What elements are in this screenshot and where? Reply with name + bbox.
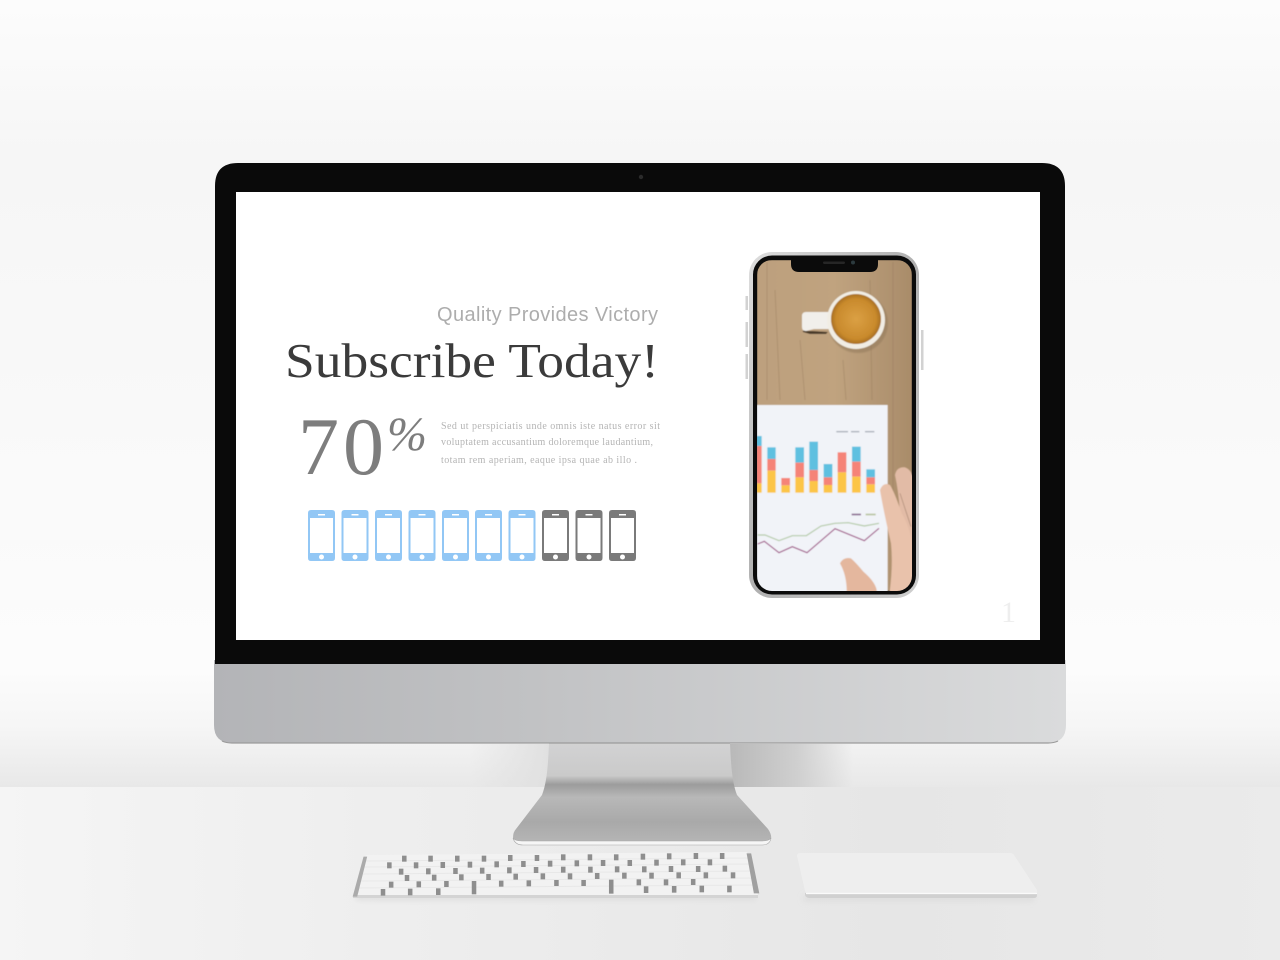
line chart	[758, 523, 879, 553]
monitor stand	[513, 743, 771, 845]
icon: blue phone 4	[408, 510, 436, 561]
chart legend	[836, 431, 876, 515]
title: Subscribe Today!	[285, 333, 659, 388]
body text	[441, 421, 660, 466]
icon: blue phone 1	[308, 510, 335, 561]
coffee cup	[802, 291, 888, 353]
background: desk surface	[0, 787, 1280, 960]
monitor black bezel	[215, 163, 1065, 664]
monitor screen	[236, 192, 1040, 640]
stacked bar chart	[757, 436, 875, 493]
keyboard key gaps	[353, 853, 759, 897]
body text: voluptatem accusantium doloremque laudantium,	[441, 437, 653, 448]
trackpad shadow	[804, 896, 1034, 901]
phone notch	[791, 259, 878, 272]
keyboard shadow	[356, 895, 756, 900]
big percentage: 70	[298, 401, 384, 492]
hand fingers	[840, 467, 913, 597]
wood table	[757, 260, 912, 591]
phone screen photo	[757, 260, 913, 597]
big percentage	[298, 401, 427, 492]
icon: grey phone 10	[609, 510, 636, 561]
big percentage: %	[387, 408, 427, 461]
icon: blue phone 7	[508, 510, 536, 561]
icon: blue phone 3	[375, 510, 402, 561]
icon: blue phone 2	[342, 510, 368, 561]
trackpad surface	[797, 853, 1037, 894]
paper with charts	[757, 405, 913, 597]
monitor body	[214, 163, 1066, 743]
monitor cast shadow right	[728, 744, 853, 787]
body text: Sed ut perspiciatis unde omnis iste natus error sit	[441, 421, 660, 432]
icon: blue phone 6	[475, 510, 502, 561]
keyboard deck	[353, 852, 758, 898]
monitor cast shadow left	[470, 744, 550, 787]
icon: blue phone 5	[442, 510, 469, 561]
trackpad	[797, 853, 1037, 901]
smartphone mockup	[746, 252, 924, 598]
keyboard row lines	[357, 858, 756, 888]
subtitle: Quality Provides Victory	[437, 304, 658, 326]
keyboard	[353, 852, 759, 900]
icon: grey phone 8	[542, 510, 569, 561]
phone side buttons	[746, 296, 924, 379]
body text: totam rem aperiam, eaque ipsa quae ab illo .	[441, 455, 637, 466]
icon: grey phone 9	[576, 510, 602, 561]
webcam	[639, 175, 643, 179]
pictogram: 7 of 10 phones	[308, 510, 636, 561]
page number: 1	[1001, 596, 1016, 629]
phone frame	[749, 252, 919, 598]
monitor chin	[214, 660, 1066, 743]
